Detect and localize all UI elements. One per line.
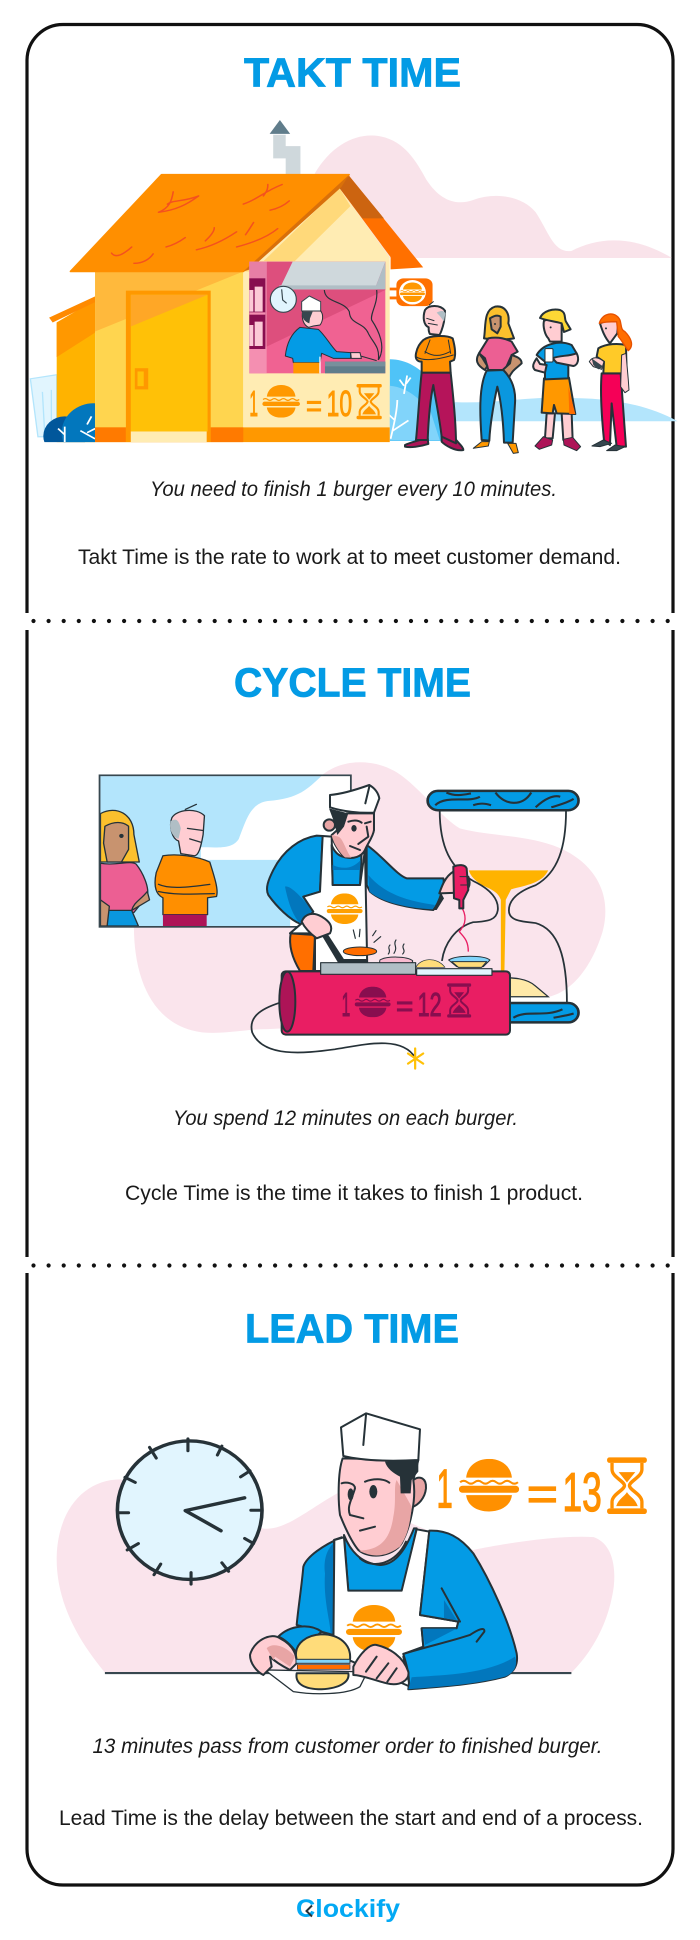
dotted divider 2 [34, 1263, 668, 1268]
cook [267, 785, 510, 1035]
dynamite equation: 12 [418, 987, 442, 1024]
caption: takt example: You need to finish 1 burger every 10 minutes. [150, 478, 557, 501]
background pink hill [315, 135, 672, 258]
right hand [353, 1645, 408, 1684]
hourglass [428, 791, 579, 1022]
pink blob [57, 1479, 614, 1673]
chimney [270, 120, 300, 180]
fuse spark [408, 1048, 423, 1069]
counter line [105, 1671, 571, 1676]
title: cycle time: CYCLE TIME [234, 660, 471, 706]
caption: cycle example: You spend 12 minutes on each burger. [173, 1107, 518, 1130]
apron [333, 1529, 458, 1687]
right arm [403, 1531, 517, 1689]
equation: 1 burger = 13: 13 [562, 1461, 602, 1523]
equation: 1 burger = 10 [249, 383, 382, 424]
dynamite fuse [251, 1001, 415, 1058]
title: lead time: LEAD TIME [245, 1306, 459, 1352]
head [324, 785, 379, 858]
logo: clockify: Clockify [296, 1895, 400, 1923]
burger [296, 1634, 350, 1689]
door [126, 291, 211, 442]
dynamite equation: 1 [342, 987, 350, 1024]
customer: woman with blue jeans [473, 306, 522, 453]
trash can [30, 375, 57, 437]
equation: 1 burger = 13: = [527, 1469, 558, 1521]
illustration: burger house and queue [30, 120, 678, 462]
left hand [250, 1626, 322, 1675]
plate paper [265, 1670, 365, 1694]
house wall [95, 188, 390, 442]
illustration: cook at the grill [100, 762, 605, 1069]
ketchup bottle [439, 865, 470, 952]
left sleeve and shoulder [297, 1528, 417, 1635]
customer: red-haired woman [589, 314, 632, 451]
definition: takt time: Takt Time is the rate to work at to meet customer demand. [78, 546, 621, 569]
equation: 1 burger = 13 [437, 1457, 647, 1523]
equation: 1 burger = 10: = [306, 390, 322, 423]
customer: blond man with shorts [533, 309, 581, 451]
equation: 1 burger = 10: 10 [327, 383, 352, 424]
definition: lead time: Lead Time is the delay between the start and end of a process. [59, 1807, 643, 1830]
hanging burger sign [390, 278, 433, 306]
queue of customers [405, 302, 632, 453]
roof [71, 175, 423, 271]
caption: lead example: 13 minutes pass from customer order to finished burger. [92, 1735, 602, 1758]
customer: old man [405, 302, 463, 450]
side shed [49, 296, 95, 442]
wall clock [117, 1439, 262, 1584]
dynamite body [279, 971, 510, 1035]
torso and apron [267, 836, 367, 971]
right arm [367, 845, 444, 910]
background blue hills [388, 359, 678, 441]
illustration: cook with finished burger [57, 1413, 647, 1694]
dotted divider 1 [34, 619, 668, 623]
head [339, 1413, 426, 1564]
grill and food [321, 929, 492, 975]
equation: 1 burger = 13: 1 [437, 1458, 453, 1519]
title: takt time: TAKT TIME [244, 50, 461, 96]
apron burger [327, 893, 363, 924]
pink blob [134, 762, 605, 1033]
window with customers [100, 775, 351, 927]
dynamite equation: = [396, 991, 413, 1023]
service window [249, 262, 385, 373]
dynamite equation [342, 983, 471, 1024]
definition: cycle time: Cycle Time is the time it takes to finish 1 product. [125, 1182, 583, 1205]
left hand with spatula [302, 914, 367, 964]
apron burger [346, 1605, 402, 1652]
trousers [290, 933, 315, 971]
equation: 1 burger = 10: 1 [249, 383, 258, 424]
base strip [95, 427, 390, 442]
bushes [43, 403, 95, 442]
cook [250, 1413, 517, 1694]
